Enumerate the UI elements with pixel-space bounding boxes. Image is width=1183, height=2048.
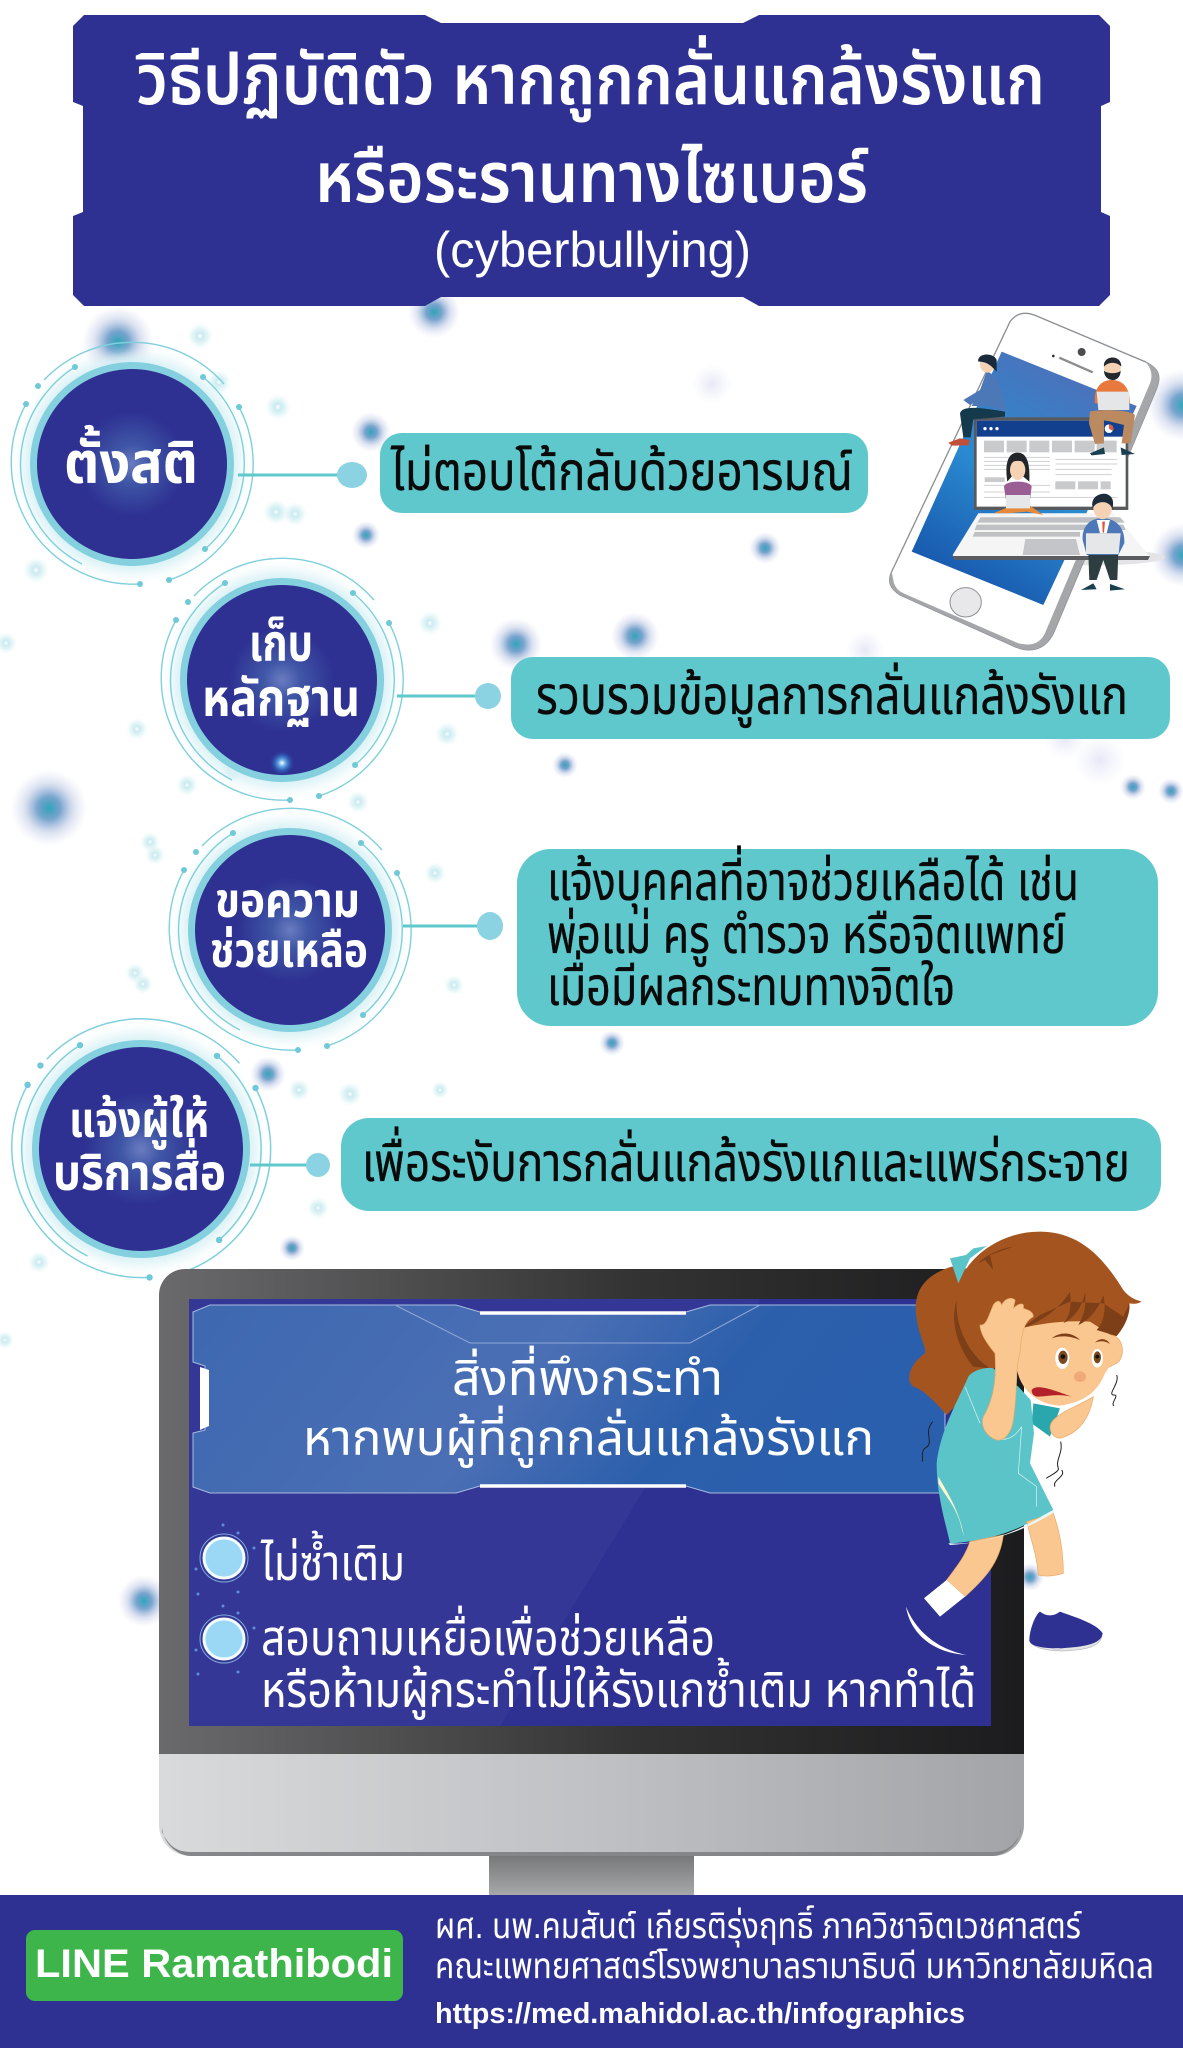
bullet 1	[194, 1524, 405, 1596]
connector 1	[238, 462, 367, 488]
bullet 1: ไม่ซ้ำเติม	[260, 1530, 405, 1591]
title line 2: หรือระรานทางไซเบอร์	[315, 139, 869, 217]
connector 3	[403, 912, 503, 940]
website url: https://med.mahidol.ac.th/infographics	[435, 1998, 965, 2030]
bullet 2	[194, 1604, 976, 1720]
person standing front	[1081, 494, 1125, 591]
callout 1	[380, 433, 868, 513]
person sitting top right	[1089, 358, 1135, 455]
callout 1: ไม่ตอบโต้กลับด้วยอารมณ์	[390, 442, 853, 502]
circle step 2: เก็บหลักฐาน: เก็บ	[249, 615, 313, 673]
circle step 2: เก็บหลักฐาน: หลักฐาน	[202, 670, 360, 728]
circle step 3: ขอความช่วยเหลือ	[169, 808, 411, 1053]
laptop	[953, 417, 1150, 560]
author credit: ผศ. นพ.คมสันต์ เกียรติรุ่งฤทธิ์ ภาควิชาจิตเวชศาสตร์	[435, 1905, 1083, 1947]
heading line 2: หากพบผู้ที่ถูกกลั่นแกล้งรังแก	[303, 1405, 874, 1468]
bullet 2: หรือห้ามผู้กระทำไม่ให้รังแกซ้ำเติม หากทำได้	[261, 1657, 976, 1720]
author credit	[435, 1905, 1154, 1986]
circle step 2: เก็บหลักฐาน	[161, 558, 403, 803]
circle step 1: ตั้งสติ	[11, 342, 253, 587]
LINE badge: LINE Ramathibodi	[35, 1942, 393, 1986]
callout 2	[511, 657, 1170, 739]
title line 1: วิธีปฏิบัติตัว หากถูกกลั่นแกล้งรังแก	[136, 35, 1045, 122]
circle step 3: ขอความช่วยเหลือ: ขอความ	[215, 875, 360, 928]
person sitting on keyboard	[993, 453, 1043, 515]
illustration: phone and laptop with people	[890, 313, 1165, 650]
illustration: frightened girl	[906, 1232, 1142, 1655]
footer band	[0, 1895, 1183, 2048]
bullet 2: สอบถามเหยื่อเพื่อช่วยเหลือ	[261, 1605, 715, 1666]
title banner	[73, 15, 1110, 306]
circle step 4: แจ้งผู้ให้บริการสื่อ: แจ้งผู้ให้	[69, 1092, 209, 1150]
circle step 3: ขอความช่วยเหลือ: ช่วยเหลือ	[210, 925, 368, 978]
monitor screen	[189, 1299, 991, 1726]
screen heading panel	[193, 1305, 945, 1493]
title line 3: (cyberbullying)	[434, 222, 751, 278]
monitor bezel	[159, 1269, 1024, 1754]
monitor	[159, 1269, 1024, 1896]
circle step 4: แจ้งผู้ให้บริการสื่อ	[12, 1019, 271, 1281]
heading line 1: สิ่งที่พึงกระทำ	[452, 1345, 723, 1406]
monitor chin	[159, 1754, 1024, 1856]
connector 2	[397, 683, 501, 709]
callout 3: เมื่อมีผลกระทบทางจิตใจ	[547, 950, 955, 1017]
callout 3	[517, 845, 1158, 1026]
LINE badge	[26, 1930, 403, 2001]
monitor stand	[489, 1850, 694, 1896]
callout 4	[341, 1118, 1161, 1211]
circle step 4: แจ้งผู้ให้บริการสื่อ: บริการสื่อ	[53, 1138, 226, 1201]
background: blurred network dots	[0, 286, 1183, 1627]
person sitting top left	[948, 355, 1005, 446]
circle step 1: ตั้งสติ: ตั้งสติ	[64, 424, 198, 496]
connector 4	[250, 1153, 330, 1177]
